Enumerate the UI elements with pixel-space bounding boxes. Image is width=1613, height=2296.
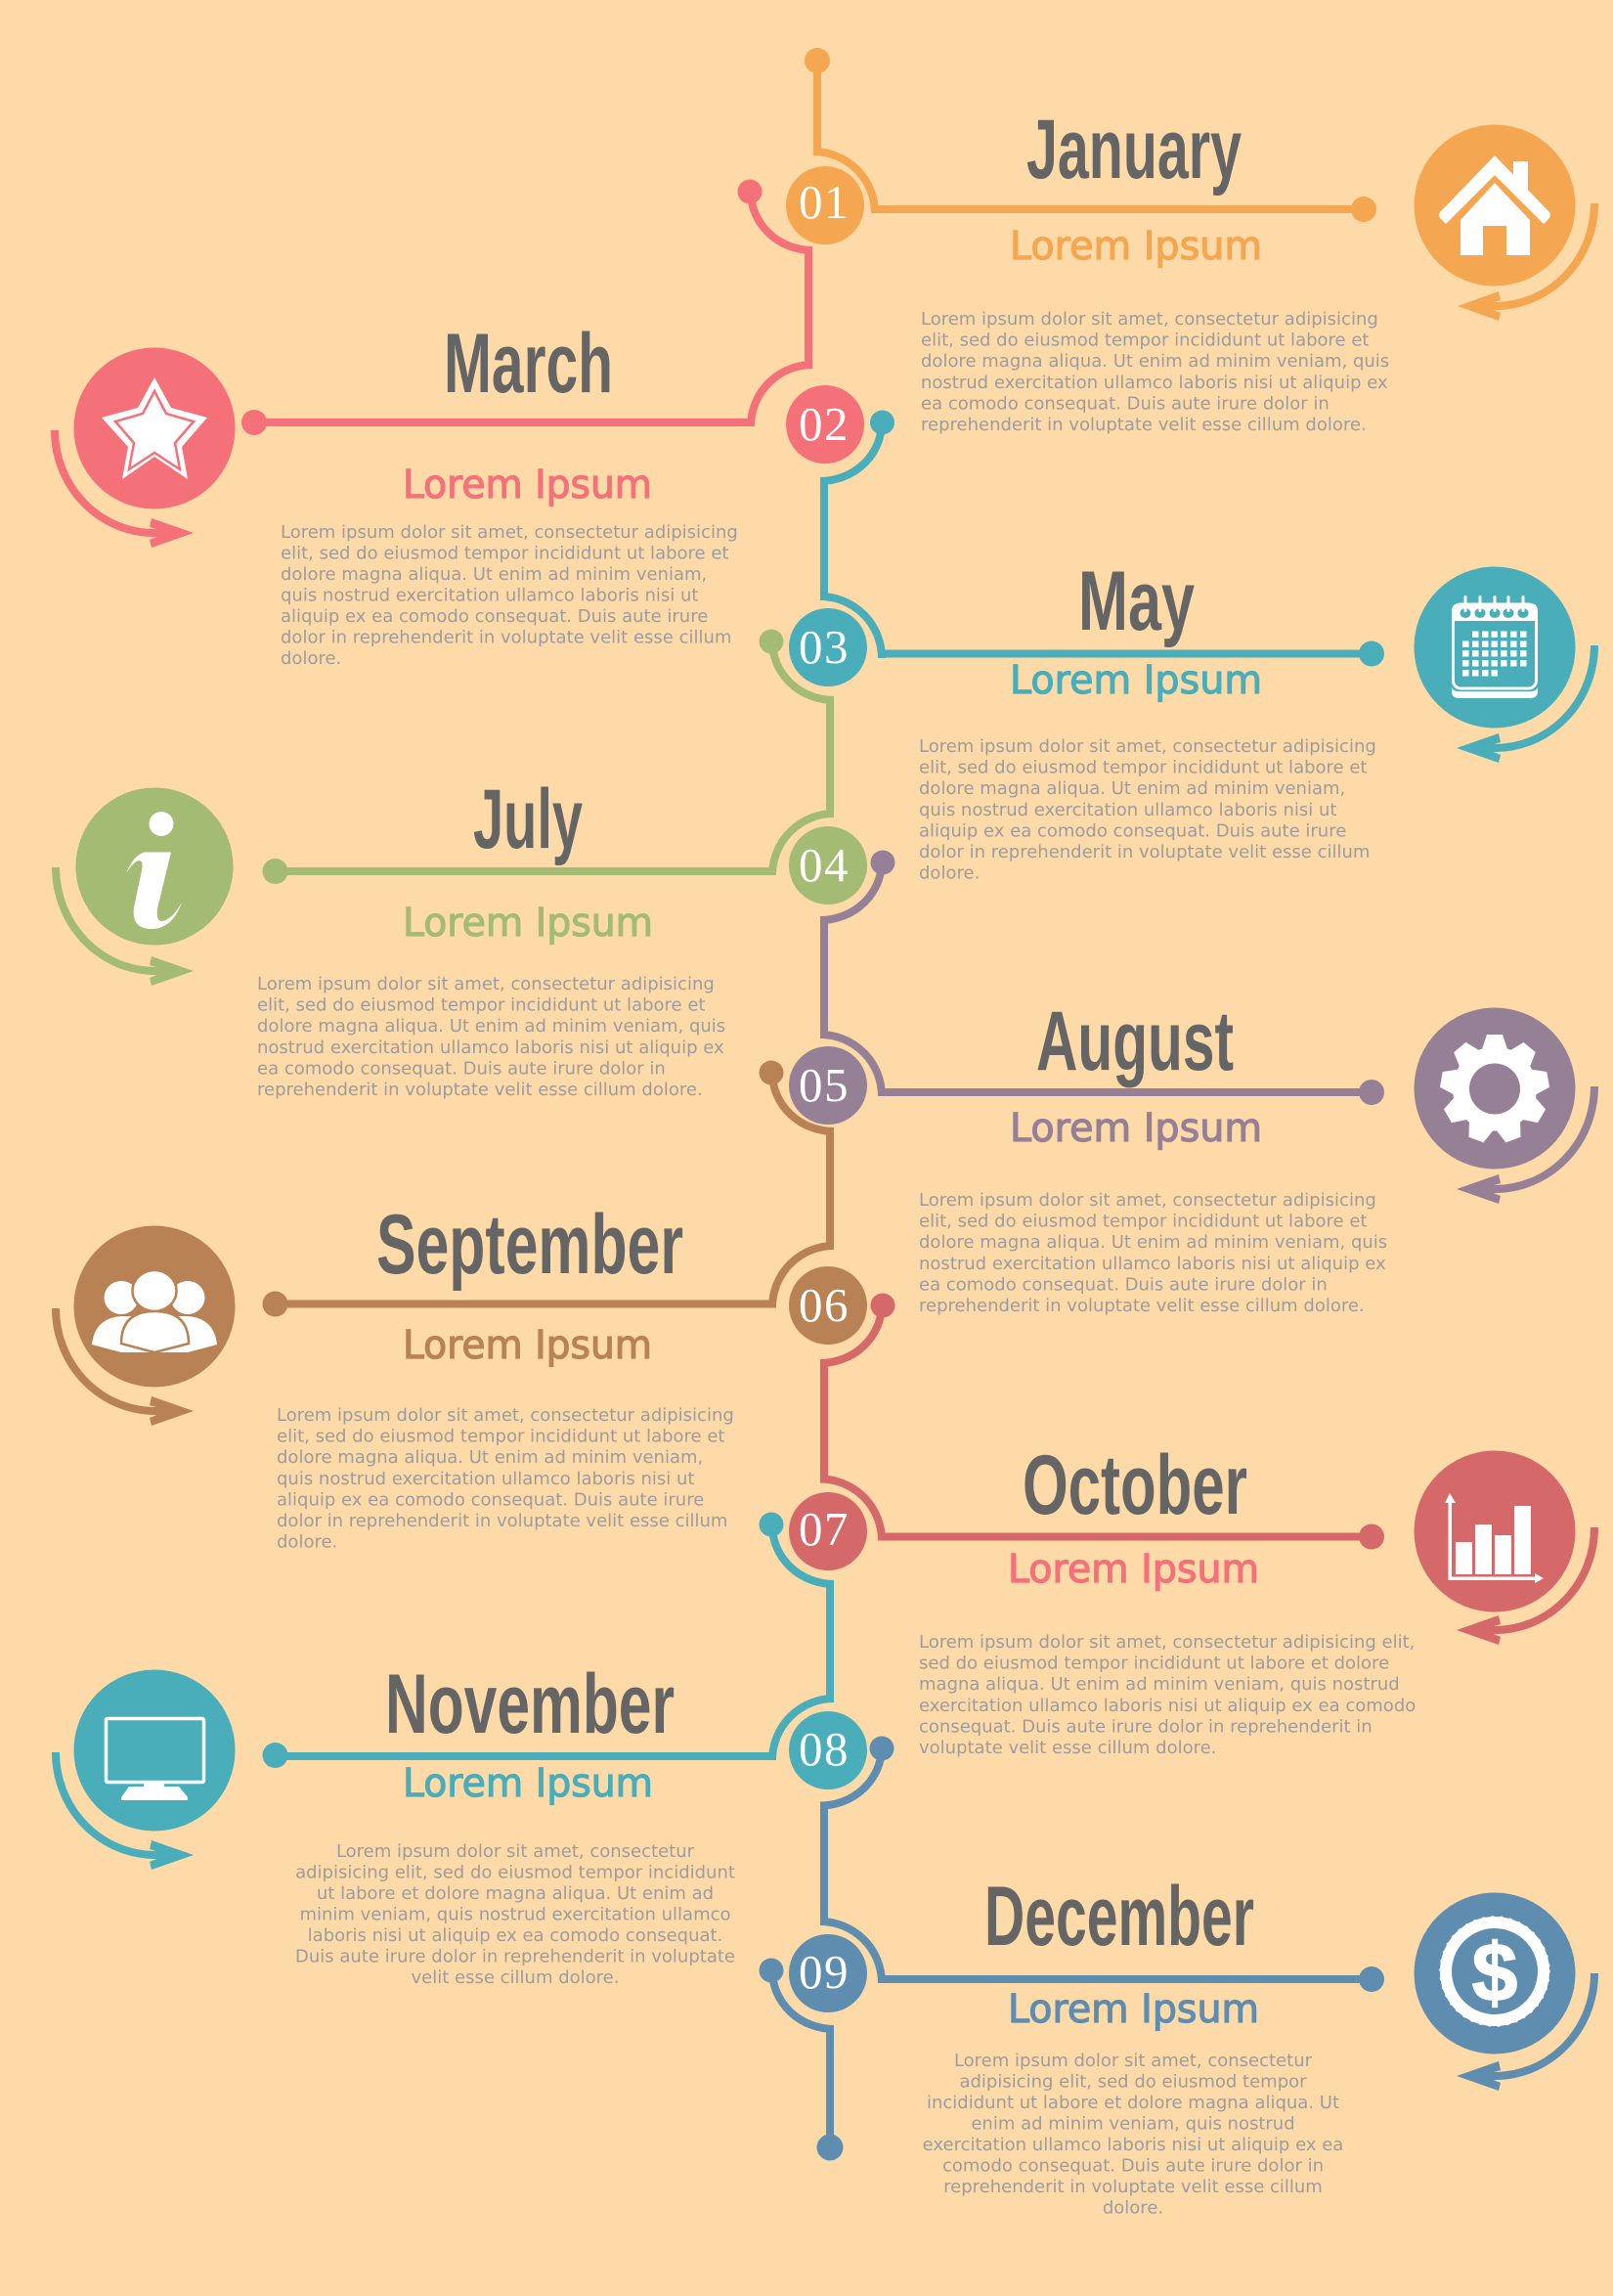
node 06 xyxy=(789,1266,867,1345)
text block: ea comodo consequat. Duis aute irure dolor in xyxy=(919,1274,1328,1295)
subheading: Lorem Ipsum xyxy=(1008,1987,1259,2032)
text block: dolore. xyxy=(281,648,341,669)
arrow: circular xyxy=(1458,203,1594,321)
text block: elit, sed do eiusmod tempor incididunt ut labore et xyxy=(919,758,1367,778)
node 06: 06 xyxy=(799,1278,850,1332)
subheading: Lorem Ipsum xyxy=(1010,1106,1262,1151)
heading: March: March xyxy=(444,317,613,411)
node 02 xyxy=(786,385,864,464)
text block: Lorem ipsum dolor sit amet, consectetur adipisicing xyxy=(277,1405,734,1426)
text block: ea comodo consequat. Duis aute irure dolor in xyxy=(921,393,1330,414)
text block: adipisicing elit, sed do eiusmod tempor xyxy=(959,2071,1307,2093)
subheading: Lorem Ipsum xyxy=(1010,658,1262,703)
timeline segment: end stem xyxy=(759,1958,843,2161)
timeline segment: May connector xyxy=(820,411,1384,667)
text block: exercitation ullamco laboris nisi ut aliquip ex ea xyxy=(923,2135,1343,2155)
icon: dollar coin: $ xyxy=(1472,1926,1517,2018)
text block: velit esse cillum dolore. xyxy=(412,1967,619,1988)
timeline segment: October connector xyxy=(820,1293,1384,1549)
text block: Duis aute irure dolor in reprehenderit in voluptate xyxy=(295,1946,735,1967)
timeline segment: November connector xyxy=(262,1512,834,1768)
text block: nostrud exercitation ullamco laboris nisi ut aliquip ex xyxy=(919,1254,1386,1274)
text block: dolore magna aliqua. Ut enim ad minim veniam, xyxy=(281,564,707,585)
text block: reprehenderit in voluptate velit esse cillum xyxy=(943,2177,1323,2197)
text block: elit, sed do eiusmod tempor incididunt ut labore et xyxy=(281,544,728,563)
subheading: Lorem Ipsum xyxy=(403,1761,653,1806)
text block: elit, sed do eiusmod tempor incididunt ut labore et xyxy=(919,1212,1367,1232)
text block: elit, sed do eiusmod tempor incididunt ut labore et xyxy=(921,331,1369,351)
text block: incididunt ut labore et dolore magna aliqua. Ut xyxy=(927,2093,1339,2113)
icon: gear xyxy=(1414,1007,1576,1170)
timeline segment: January connector xyxy=(805,48,1376,222)
panel: July xyxy=(56,773,725,1100)
node 04 xyxy=(789,826,867,905)
text block: comodo consequat. Duis aute irure dolor in xyxy=(942,2155,1324,2177)
text block: sed do eiusmod tempor incididunt ut labore et dolore xyxy=(919,1654,1389,1674)
node 02: 02 xyxy=(799,397,850,451)
node 07 xyxy=(789,1492,867,1570)
node 09 xyxy=(789,1934,867,2012)
arrow: circular xyxy=(56,1752,194,1870)
text block: aliquip ex ea comodo consequat. Duis aute irure xyxy=(281,606,708,627)
node 01: 01 xyxy=(799,175,850,229)
text block: reprehenderit in voluptate velit esse cillum dolore. xyxy=(921,415,1367,435)
text block: quis nostrud exercitation ullamco laboris nisi ut xyxy=(919,800,1336,820)
text block: Lorem ipsum dolor sit amet, consectetur adipisicing xyxy=(281,522,738,543)
text block: laboris nisi ut aliquip ex ea comodo consequat. xyxy=(308,1925,722,1946)
text block: dolor in reprehenderit in voluptate velit esse cillum xyxy=(919,842,1370,862)
node 08: 08 xyxy=(799,1722,850,1776)
timeline segment: September connector xyxy=(262,1060,834,1316)
text block: voluptate velit esse cillum dolore. xyxy=(919,1738,1216,1758)
text block: Lorem ipsum dolor sit amet, consectetur adipisicing elit, xyxy=(919,1632,1415,1653)
text block: exercitation ullamco laboris nisi ut aliquip ex ea comodo xyxy=(919,1696,1416,1716)
heading: August: August xyxy=(1036,994,1234,1088)
text block: Lorem ipsum dolor sit amet, consectetur adipisicing xyxy=(257,974,715,994)
subheading: Lorem Ipsum xyxy=(403,463,652,508)
text block: quis nostrud exercitation ullamco laboris nisi ut xyxy=(281,585,698,606)
panel: December xyxy=(923,1870,1594,2218)
timeline segment: August connector xyxy=(820,851,1384,1105)
timeline segment: December connector xyxy=(820,1737,1384,1992)
panel: November xyxy=(56,1657,735,1988)
subheading: Lorem Ipsum xyxy=(1008,1547,1259,1592)
text block: reprehenderit in voluptate velit esse cillum dolore. xyxy=(257,1080,703,1100)
panel: January xyxy=(921,103,1594,435)
heading: December: December xyxy=(984,1870,1254,1964)
heading: January: January xyxy=(1026,103,1242,197)
panel: May xyxy=(919,554,1594,884)
text block: quis nostrud exercitation ullamco laboris nisi ut xyxy=(277,1469,694,1489)
icon: info xyxy=(76,788,233,945)
node 09: 09 xyxy=(799,1945,850,1999)
arrow: circular xyxy=(1457,645,1594,763)
timeline segment: March connector xyxy=(241,180,812,435)
panel: October xyxy=(919,1438,1594,1758)
icon: star xyxy=(74,348,235,508)
text block: Lorem ipsum dolor sit amet, consectetur adipisicing xyxy=(921,309,1378,330)
node 01 xyxy=(786,166,864,244)
node 04: 04 xyxy=(799,838,850,892)
arrow: circular xyxy=(1457,1527,1594,1645)
text block: dolore magna aliqua. Ut enim ad minim veniam, xyxy=(277,1447,703,1468)
node 03: 03 xyxy=(799,620,850,674)
arrow: circular xyxy=(1457,1086,1594,1204)
text block: Lorem ipsum dolor sit amet, consectetur xyxy=(336,1841,695,1862)
text block: dolore magna aliqua. Ut enim ad minim veniam, quis xyxy=(921,351,1389,372)
panel: September xyxy=(56,1198,734,1553)
text block: ea comodo consequat. Duis aute irure dolor in xyxy=(257,1058,666,1079)
text block: aliquip ex ea comodo consequat. Duis aute irure xyxy=(919,820,1346,841)
text block: dolor in reprehenderit in voluptate velit esse cillum xyxy=(281,628,731,647)
text block: nostrud exercitation ullamco laboris nisi ut aliquip ex xyxy=(257,1038,724,1058)
heading: May: May xyxy=(1078,554,1195,648)
arrow: circular xyxy=(1457,1973,1594,2091)
arrow: circular xyxy=(56,867,194,986)
text block: elit, sed do eiusmod tempor incididunt ut labore et xyxy=(257,995,705,1016)
text block: dolore magna aliqua. Ut enim ad minim veniam, quis xyxy=(919,1232,1387,1253)
text block: aliquip ex ea comodo consequat. Duis aute irure xyxy=(277,1489,704,1510)
text block: enim ad minim veniam, quis nostrud xyxy=(971,2114,1295,2134)
text block: dolore. xyxy=(277,1532,337,1553)
text block: nostrud exercitation ullamco laboris nisi ut aliquip ex xyxy=(921,373,1388,393)
text block: dolore magna aliqua. Ut enim ad minim veniam, xyxy=(919,778,1345,799)
text block: consequat. Duis aute irure dolor in reprehenderit in xyxy=(919,1716,1373,1737)
icon: monitor xyxy=(74,1670,235,1831)
text block: magna aliqua. Ut enim ad minim veniam, quis nostrud xyxy=(919,1674,1400,1695)
heading: July: July xyxy=(473,773,583,866)
subheading: Lorem Ipsum xyxy=(1010,224,1262,269)
subheading: Lorem Ipsum xyxy=(403,901,653,946)
text block: Lorem ipsum dolor sit amet, consectetur adipisicing xyxy=(919,736,1376,757)
text block: adipisicing elit, sed do eiusmod tempor incididunt xyxy=(295,1862,735,1883)
text block: elit, sed do eiusmod tempor incididunt ut labore et xyxy=(277,1427,724,1447)
node 07: 07 xyxy=(799,1502,850,1556)
heading: November: November xyxy=(385,1657,675,1751)
panel: August xyxy=(919,994,1594,1316)
text block: minim veniam, quis nostrud exercitation ullamco xyxy=(299,1905,731,1924)
text block: dolore magna aliqua. Ut enim ad minim veniam, quis xyxy=(257,1016,725,1037)
subheading: Lorem Ipsum xyxy=(403,1323,652,1368)
timeline segment: July connector xyxy=(262,630,834,884)
icon: bar chart xyxy=(1414,1451,1576,1612)
text block: dolore. xyxy=(919,863,980,884)
text block: ut labore et dolore magna aliqua. Ut enim ad xyxy=(317,1883,714,1904)
heading: October: October xyxy=(1023,1438,1247,1532)
node 08 xyxy=(789,1711,867,1789)
arrow: circular xyxy=(56,1308,194,1426)
text block: Lorem ipsum dolor sit amet, consectetur adipisicing xyxy=(919,1190,1376,1211)
node 03 xyxy=(789,608,867,686)
arrow: circular xyxy=(55,430,194,548)
text block: Lorem ipsum dolor sit amet, consectetur xyxy=(954,2051,1313,2071)
node 05: 05 xyxy=(799,1058,850,1112)
node 05 xyxy=(789,1046,867,1125)
text block: dolor in reprehenderit in voluptate velit esse cillum xyxy=(277,1511,727,1531)
panel: March xyxy=(55,317,738,669)
icon: calendar xyxy=(1414,567,1576,728)
text block: reprehenderit in voluptate velit esse cillum dolore. xyxy=(919,1296,1365,1316)
heading: September: September xyxy=(376,1198,683,1292)
icon: house xyxy=(1414,125,1576,286)
icon: dollar coin xyxy=(1414,1893,1576,2053)
text block: dolore. xyxy=(1103,2198,1163,2218)
icon: people xyxy=(74,1226,235,1387)
